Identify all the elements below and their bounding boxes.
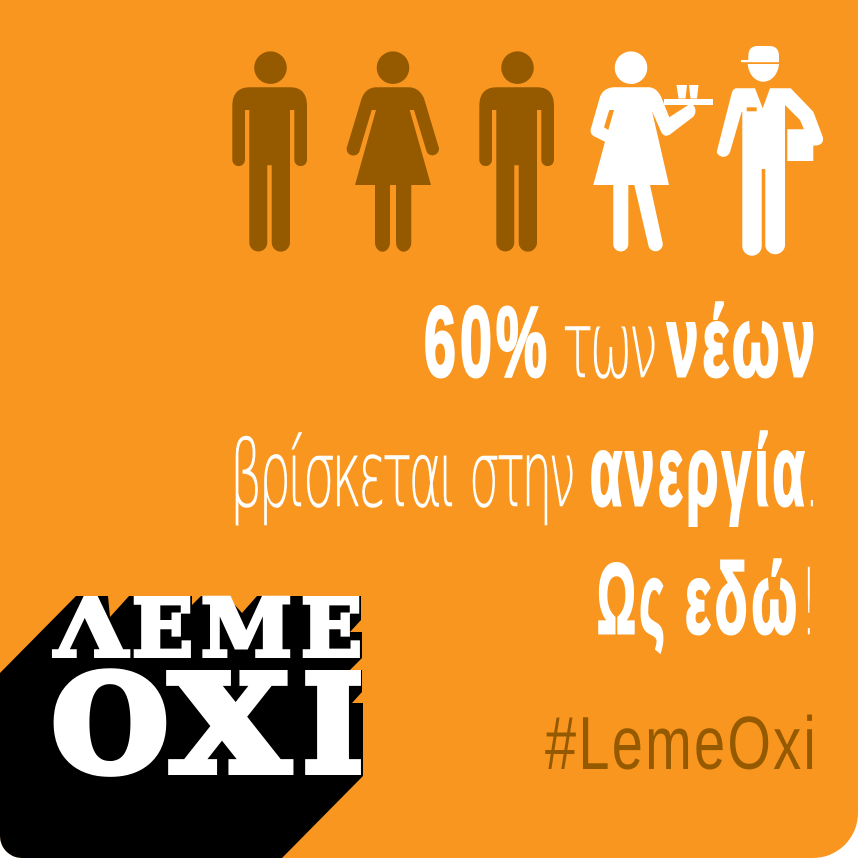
text: ! bbox=[802, 549, 813, 656]
logo wordmark: ΛΕΜΕ: Μ bbox=[201, 581, 292, 675]
icon: waitress unemployed bbox=[591, 51, 713, 252]
logo wordmark: ΛΕΜΕ bbox=[54, 581, 362, 675]
logo wordmark: ΛΕΜΕ: Ε bbox=[132, 581, 193, 675]
headline: line 3: Ως bbox=[597, 543, 668, 654]
icon: man 2 employed bbox=[479, 51, 554, 252]
logo long shadow bbox=[0, 596, 363, 858]
headline: line 1: 60% bbox=[424, 286, 551, 397]
logo wordmark: ΛΕΜΕ: Ε bbox=[301, 581, 362, 675]
logo wordmark: ΛΕΜΕ: Λ bbox=[54, 581, 128, 675]
icon: man 1 employed bbox=[232, 51, 307, 252]
headline: line 2: βρίσκεται bbox=[230, 421, 454, 528]
logo wordmark: ΟΧΙ: Χ bbox=[170, 647, 290, 803]
headline: line 2: στην bbox=[469, 421, 573, 528]
icon: woman employed bbox=[347, 51, 439, 252]
text: . bbox=[806, 421, 815, 528]
headline: line 1: των bbox=[562, 292, 655, 399]
headline: line 1 bbox=[424, 286, 819, 399]
logo wordmark: ΟΧΙ bbox=[52, 647, 363, 803]
icon: delivery man unemployed bbox=[717, 46, 823, 256]
logo wordmark: ΟΧΙ: Ι bbox=[303, 647, 363, 803]
headline: line 2 bbox=[230, 415, 815, 528]
logo wordmark: ΟΧΙ: Ο bbox=[52, 647, 168, 803]
headline: line 3 bbox=[597, 543, 813, 656]
